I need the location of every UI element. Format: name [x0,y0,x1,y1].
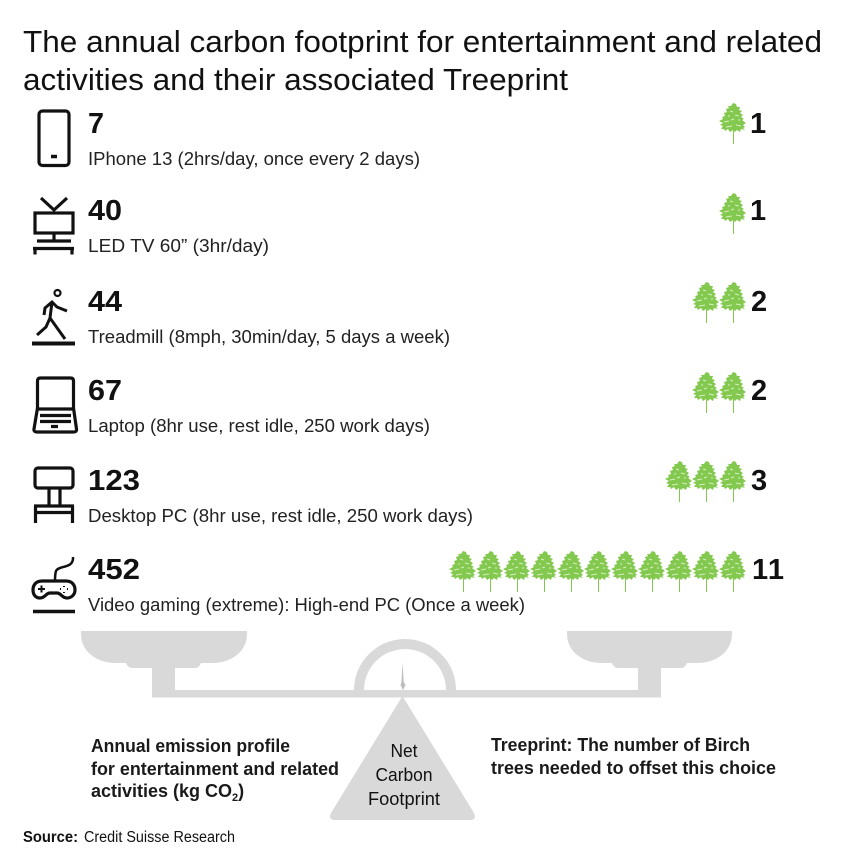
label: Video gaming: Video gaming (extreme): High-end PC (Once a week) [88,595,525,615]
fulcrum triangle [330,696,475,820]
source: Source: [23,829,78,846]
trees: 1 [719,193,746,234]
icon: game controller [33,557,75,612]
title [23,25,822,97]
right caption: trees needed to offset this choice [491,758,776,778]
tree count: 1: 1 [750,108,766,140]
label: Desktop PC: Desktop PC (8hr use, rest idle, 250 work days) [88,506,473,526]
trees: 1 [719,103,746,144]
left caption: ) [238,781,244,801]
source: Credit Suisse Research [84,829,235,846]
trees: 2 [692,282,746,323]
left caption: for entertainment and related [91,759,339,779]
icon: desktop computer [34,468,74,523]
icon: television [33,198,74,254]
title: activities and their associated Treeprint [23,63,569,97]
fulcrum label: Carbon [376,765,432,785]
tree count: 1: 1 [750,195,766,227]
tree count: 2: 2 [751,375,767,407]
row: Treadmill [32,282,767,347]
beam and pan stems [152,668,661,698]
trees: 3 [665,461,746,502]
balance scale [81,631,732,820]
value: 67: 67 [88,375,122,407]
label: LED TV: LED TV 60” (3hr/day) [88,236,269,256]
right pan [567,631,732,668]
left caption: activities (kg CO [91,781,232,801]
value: 7: 7 [88,108,104,140]
row: iPhone 13 [39,103,766,169]
row: LED TV [33,193,766,256]
value: 44: 44 [88,286,122,318]
value: 452: 452 [88,554,140,586]
dial needle [400,662,406,690]
tree count: 3: 3 [751,465,767,497]
label: Laptop: Laptop (8hr use, rest idle, 250 work days) [88,416,430,436]
row: Laptop [34,372,767,436]
title: The annual carbon footprint for entertainment and related [23,25,822,59]
left pan [81,631,247,668]
dial arc [354,639,456,690]
tree count: 2: 2 [751,286,767,318]
tree count: 11: 11 [752,554,784,586]
left caption [91,736,339,804]
source [23,829,235,846]
left caption: Annual emission profile [91,736,290,756]
left caption: 2 [232,792,238,804]
row: Video gaming [33,551,784,615]
icon: laptop [34,378,77,432]
label: iPhone 13: IPhone 13 (2hrs/day, once every 2 days) [88,149,420,169]
right caption: Treeprint: The number of Birch [491,735,750,755]
label: Treadmill: Treadmill (8mph, 30min/day, 5 days a week) [88,327,450,347]
icon: smartphone [39,111,69,166]
value: 123: 123 [88,465,140,497]
value: 40: 40 [88,195,122,227]
fulcrum label: Net [390,741,418,761]
trees: 2 [692,372,746,413]
icon: person on treadmill [32,290,75,344]
fulcrum label [368,741,440,809]
right caption [491,735,776,778]
row: Desktop PC [34,461,767,526]
trees: 11 [449,551,746,592]
fulcrum label: Footprint [368,789,440,809]
